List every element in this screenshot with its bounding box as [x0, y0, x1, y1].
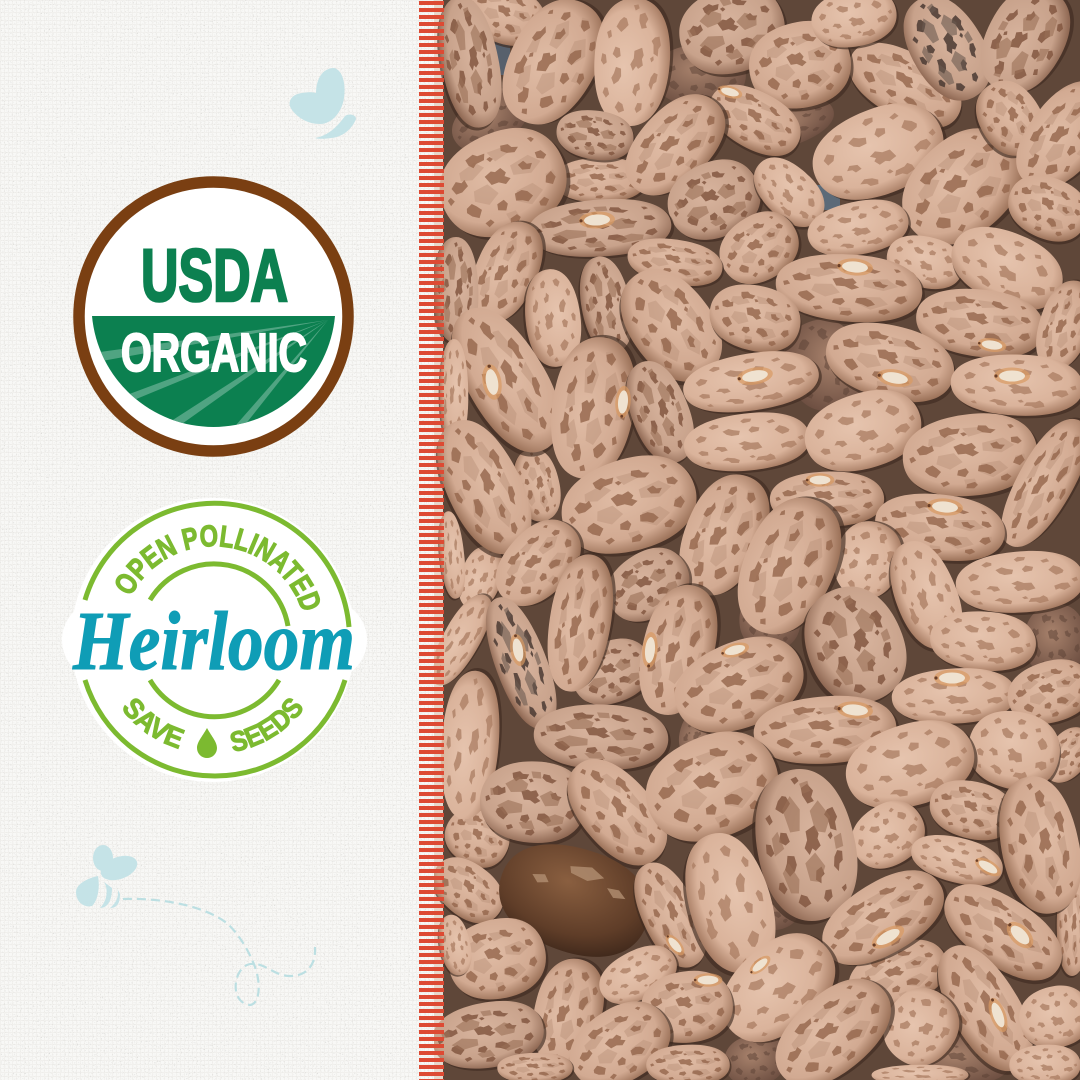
ORGANIC wordmark: ORGANIC [121, 323, 307, 383]
icon: seed drop [197, 728, 217, 758]
photo: pinto beans [418, 0, 1080, 1080]
arc text: seeds: SEEDS [230, 698, 302, 752]
stitched red edge [419, 0, 444, 1080]
arc text: save: SAVE [123, 698, 186, 750]
USDA wordmark: USDA [141, 234, 288, 317]
green field with rays [92, 316, 335, 435]
arc text: open pollinated: OPEN POLLINATED [116, 524, 320, 610]
badge: USDA Organic seal [79, 182, 348, 451]
icon: bee with dashed flight trail [76, 845, 315, 1005]
badge: Heirloom open pollinated [62, 498, 367, 782]
script wordmark: Heirloom: Heirloom [72, 595, 355, 688]
icon: butterfly [290, 68, 356, 139]
panel: linen fabric background [0, 0, 434, 1080]
